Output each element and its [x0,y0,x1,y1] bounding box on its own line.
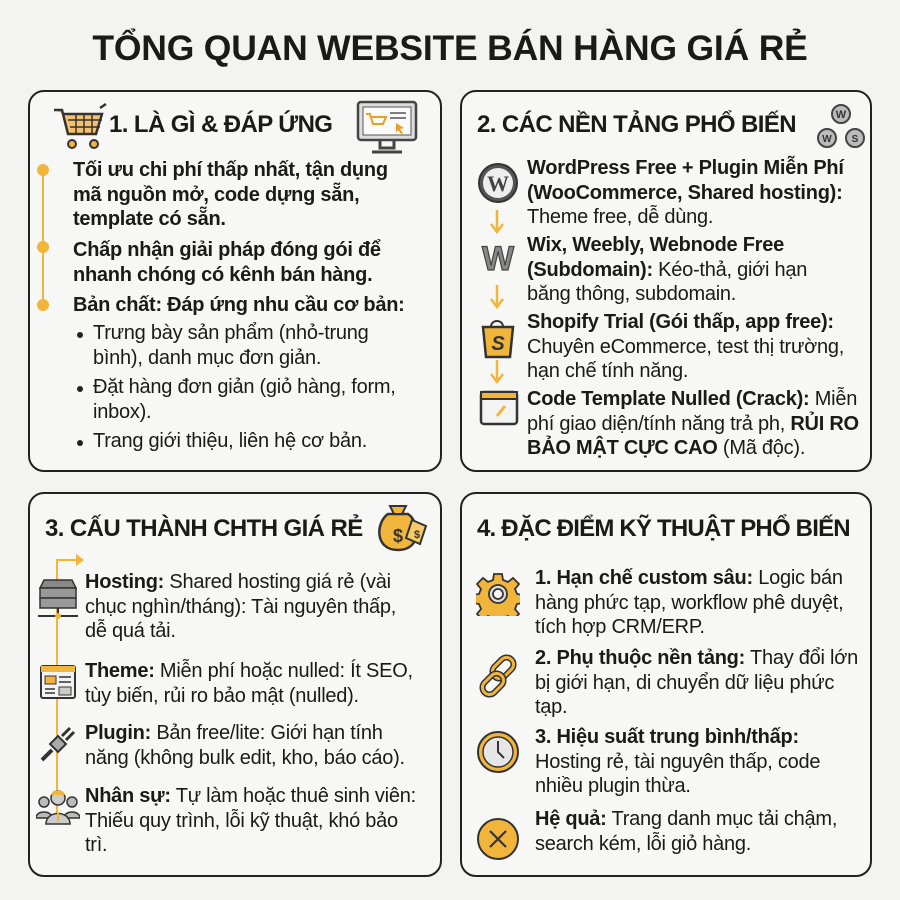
heading 2: 2. CÁC NỀN TẢNG PHỔ BIẾN [477,111,796,138]
text: main points: template có sẵn. [73,208,226,230]
heading 1: 1. LÀ GÌ & ĐÁP ỨNG [109,111,332,138]
text: platforms [527,156,844,228]
panel: 2 platforms: Wix, Weebly, Webnode Free [527,234,784,256]
panel: 2 platforms: Code Template Nulled (Crack): Miễn [527,388,857,410]
panel: 3 cost components: Thiếu quy trình, lỗi kỹ thuật, khó bảo [85,810,398,832]
text: characteristics: tích hợp CRM/ERP. [535,616,705,638]
icon: monitor [356,100,418,154]
sub bullets [77,322,396,452]
panel: 4 technical characteristics: bị giới hạn, di chuyển dữ liệu phức [535,672,834,694]
heading 3: 3. CẤU THÀNH CHTH GIÁ RẺ [45,515,363,542]
panel: 2 platforms [460,90,872,472]
panel: 2 platforms: BẢO MẬT CỰC CAO (Mã độc). [527,437,805,459]
panel: 4 technical characteristics: nhiều plugin thừa. [535,775,691,797]
text: platforms: WordPress Free + Plugin Miễn Phí [527,157,844,179]
icon: server [38,579,78,619]
panel: 1 what is it: Bản chất: Đáp ứng nhu cầu cơ bản: [73,294,405,316]
arrow [490,210,504,234]
text: main points: mã nguồn mở, code dựng sẵn, [73,184,359,206]
icon: code window [480,390,518,426]
icon: clock [477,731,519,773]
icon: people [36,790,80,825]
icon: plug [40,727,75,762]
text: platforms: (WooCommerce, Shared hosting): [527,182,842,204]
panel: 2 platforms: Shopify Trial (Gói thấp, app free): [527,311,834,333]
panel: 4 technical characteristics: 3. Hiệu suất trung bình/thấp: [535,726,799,748]
text: components: chục nghìn/tháng): Tài nguyên thấp, [85,596,396,618]
sub bullets: bình), danh mục đơn giản. [93,347,321,369]
text: characteristics: 1. Hạn chế custom sâu: Logic bán [535,567,843,589]
icon: chain [480,654,516,698]
icon: x circle [477,818,519,860]
icon: shopping cart [54,103,107,149]
panel: 3 cost components: Nhân sự: Tự làm hoặc thuê sinh viên: [85,785,416,807]
panel: 3 cost components [28,492,442,877]
panel: 4 technical characteristics: search kém, lỗi giỏ hàng. [535,833,751,855]
icon: theme layout [40,665,76,699]
sub bullets: Trang giới thiệu, liên hệ cơ bản. [93,430,367,452]
sub bullets: Trưng bày sản phẩm (nhỏ-trung [93,322,369,344]
panel: 3 cost components: Plugin: Bản free/lite: Giới hạn tính [85,722,383,744]
panel: 4 technical characteristics: tạp. [535,696,567,718]
text: platforms: Theme free, dễ dùng. [527,206,713,228]
icon: platform cluster: W [836,109,847,121]
text: components: Hosting: Shared hosting giá rẻ (vài [85,571,391,593]
panel: 4 technical characteristics: Hệ quả: Trang danh mục tải chậm, [535,808,837,830]
text: components: dễ quá tải. [85,620,176,642]
icon: shopify bag: S [491,333,505,355]
panel: 1 what is it [28,90,442,472]
panel: 3 cost components: Theme: Miễn phí hoặc nulled: Ít SEO, [85,660,413,682]
icon: wordpress [478,163,518,203]
panel: 2 platforms: (Subdomain): Kéo-thả, giới hạn [527,259,807,281]
arrow [490,360,504,384]
panel: 2 platforms: băng thông, subdomain. [527,283,736,305]
heading 4: 4. ĐẶC ĐIỂM KỸ THUẬT PHỔ BIẾN [477,515,850,542]
panel: 4 technical characteristics [460,492,872,877]
icon: shopify bag [482,320,514,358]
panel: 4 technical characteristics: Hosting rẻ, tài nguyên thấp, code [535,751,820,773]
icon: platform cluster: W [822,134,832,145]
connector line with arrow [56,554,84,813]
title: TỔNG QUAN WEBSITE BÁN HÀNG GIÁ RẺ [92,28,808,68]
panel: 3 cost components: trì. [85,834,107,856]
icon: gear [476,573,520,616]
sub bullets: inbox). [93,401,151,423]
panel: 2 platforms: phí giao diện/tính năng trả ph, RỦI RO [527,413,859,435]
text: components [85,571,396,642]
sub bullets: Đặt hàng đơn giản (giỏ hàng, form, [93,376,396,398]
text: characteristics: hàng phức tạp, workflow phê duyệt, [535,592,843,614]
icon: money bag: $ [393,526,403,546]
text: main points: Tối ưu chi phí thấp nhất, tận dụng [73,159,388,181]
icon: platform cluster [817,104,865,148]
text: main points [73,159,388,230]
panel: 3 cost components: tùy biến, rủi ro bảo mật (nulled). [85,685,359,707]
arrow [490,285,504,309]
panel: 3 cost components: năng (không bulk edit, kho, báo cáo). [85,747,405,769]
icon: platform cluster: S [852,134,859,145]
icon: money bag [378,505,428,552]
panel: 4 technical characteristics: 2. Phụ thuộc nền tảng: Thay đổi lớn [535,647,858,669]
panel: 1 what is it: Chấp nhận giải pháp đóng gói để [73,239,381,261]
text: characteristics [535,567,843,638]
icon: money bag: $ [414,529,420,541]
panel: 2 platforms: Chuyên eCommerce, test thị trường, [527,336,844,358]
icon: wordpress: W [487,171,509,196]
panel: 1 what is it: nhanh chóng có kênh bán hàng. [73,264,372,286]
timeline bullets [37,164,49,311]
panel: 2 platforms: hạn chế tính năng. [527,360,688,382]
